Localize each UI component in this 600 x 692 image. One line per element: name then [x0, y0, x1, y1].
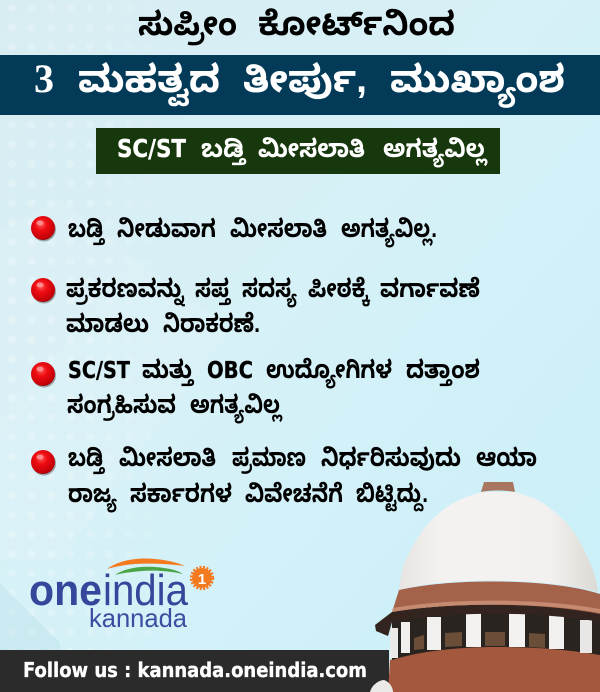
point 3: SC/ST	[68, 358, 130, 384]
point 4: ಬಡ್ತಿ	[68, 444, 105, 475]
small domes	[370, 680, 393, 692]
bullet 1	[31, 216, 56, 242]
point 1: ಮೀಸಲಾತಿ	[230, 215, 327, 243]
swoosh: orange	[107, 558, 185, 569]
point 2	[31, 275, 480, 338]
logo word india: india	[103, 566, 188, 615]
subheading box: ಅಗತ್ಯವಿಲ್ಲ	[383, 135, 488, 168]
logo word one: one	[29, 566, 102, 615]
bullet 2	[31, 278, 56, 304]
point 4: ಬಿಟ್ಟಿದ್ದು.	[356, 480, 428, 512]
logo word kannada: kannada	[89, 603, 188, 633]
point 3	[31, 356, 480, 424]
title: top heading: ಕೋರ್ಟ್‌ನಿಂದ	[258, 5, 455, 42]
point 1: ಬಡ್ತಿ	[68, 215, 105, 246]
point 4	[31, 444, 537, 513]
bullet 4	[31, 450, 56, 476]
bullet 3	[31, 362, 56, 388]
point 2: ಸಪ್ತ	[195, 275, 232, 306]
point 3: ಸಂಗ್ರಹಿಸುವ	[67, 391, 176, 421]
subheading box: ಮೀಸಲಾತಿ	[258, 135, 365, 163]
point 2: ನಿರಾಕರಣೆ.	[163, 310, 260, 338]
colonnade	[390, 608, 600, 660]
title: top heading: ಸುಪ್ರೀಂ	[138, 5, 237, 46]
point 4: ಮೀಸಲಾತಿ	[119, 444, 216, 472]
point 2: ಸದಸ್ಯ	[242, 275, 297, 308]
point 4: ವಿವೇಚನೆಗೆ	[245, 480, 343, 508]
footer bar: Follow us : kannada.oneindia.com	[23, 658, 367, 682]
swoosh: green	[115, 567, 183, 575]
point 3: OBC	[207, 358, 253, 384]
point 1	[31, 215, 437, 248]
point 4: ಸರ್ಕಾರಗಳ	[130, 480, 232, 508]
footer bar	[0, 650, 389, 692]
title: top heading	[138, 5, 455, 46]
point 1: ಅಗತ್ಯವಿಲ್ಲ.	[341, 215, 437, 248]
point 4: ನಿರ್ಧರಿಸುವುದು	[321, 444, 461, 472]
supreme court dome	[370, 482, 600, 692]
point 2: ಮಾಡಲು	[66, 310, 149, 338]
point 3: ಅಗತ್ಯವಿಲ್ಲ	[190, 391, 283, 424]
heading band: ಮಹತ್ವದ	[78, 59, 220, 107]
badge: 1	[198, 571, 206, 588]
logo: oneindia kannada	[29, 558, 213, 633]
point 2: ವರ್ಗಾವಣೆ	[380, 275, 480, 303]
subheading box	[96, 128, 500, 174]
point 4: ಪ್ರಮಾಣ	[232, 444, 306, 474]
subheading box: SC/ST	[117, 134, 186, 163]
subheading box: ಬಡ್ತಿ	[201, 135, 247, 166]
point 3: ಮತ್ತು	[142, 356, 195, 387]
brick drum	[392, 581, 600, 614]
point 4: ರಾಜ್ಯ	[68, 480, 117, 513]
eave	[375, 605, 600, 636]
heading band: ತೀರ್ಪು,	[243, 59, 367, 101]
lower brick wall	[388, 645, 600, 692]
point 3: ಉದ್ಯೋಗಿಗಳ	[266, 356, 392, 389]
point 2: ಪೀಠಕ್ಕೆ	[308, 275, 370, 307]
heading band: ಮುಖ್ಯಾಂಶ	[390, 59, 565, 108]
heading band	[0, 55, 600, 115]
point 3: ದತ್ತಾಂಶ	[406, 356, 480, 387]
finial	[481, 482, 515, 492]
point 1: ನೀಡುವಾಗ	[117, 215, 216, 243]
point 2: ಪ್ರಕರಣವನ್ನು	[66, 275, 186, 307]
heading band: 3	[34, 56, 54, 101]
dome white	[399, 492, 598, 592]
point 4: ಆಯಾ	[476, 444, 537, 472]
badge	[191, 567, 213, 589]
